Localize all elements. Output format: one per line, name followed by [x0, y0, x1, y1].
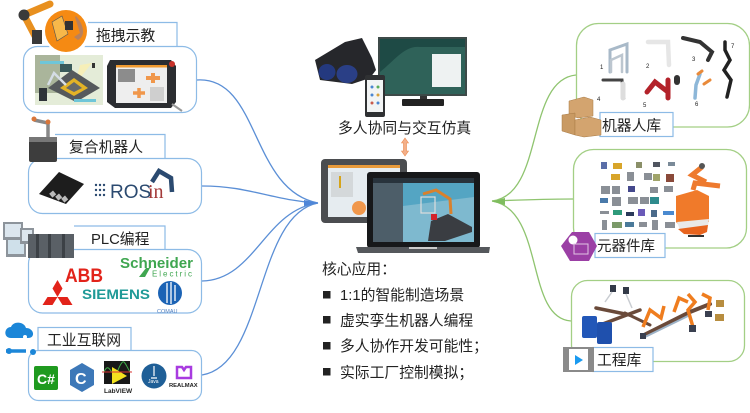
- robot library numbers: 7: [731, 44, 735, 50]
- logo: LabVIEW: [102, 361, 133, 395]
- icon: PLC modules: [28, 234, 74, 258]
- list item 3: 多人协作开发可能性；: [340, 338, 488, 355]
- panel frame: [572, 280, 744, 362]
- panel: 机器人库: [562, 24, 750, 137]
- connectors: blue curves to the core: [197, 80, 318, 375]
- icon: phone: [365, 75, 385, 117]
- icon: mobile robot: [29, 116, 57, 162]
- robot library numbers: [597, 44, 735, 109]
- robot library numbers: 5: [643, 103, 647, 109]
- heading: PLC编程: PLC编程: [91, 231, 150, 248]
- heading: 元器件库: 元器件库: [597, 238, 655, 255]
- icon: VR headset: [315, 38, 376, 84]
- heading: 核心应用: 核心应用：: [322, 260, 396, 278]
- label box: 工程库: [593, 348, 653, 372]
- arrowhead: green: [492, 198, 505, 205]
- panel frame: [28, 158, 202, 214]
- image: production line: [582, 285, 724, 344]
- logo: C++: [70, 363, 94, 392]
- logo: Mitsubishi: [42, 280, 72, 305]
- panel: 复合机器人: [28, 116, 202, 214]
- panel: 工程库: [563, 280, 744, 372]
- heading: 复合机器人: 复合机器人: [69, 138, 143, 156]
- logo: SIEMENS: SIEMENS: [82, 287, 150, 302]
- icon: cloud and tools: [5, 323, 36, 355]
- heading: 拖拽示教: 拖拽示教: [96, 28, 155, 44]
- logo: Java: Java: [148, 379, 159, 385]
- logo: Schneider Electric: Schneider: [120, 256, 193, 272]
- panel frame: [576, 24, 750, 127]
- image: component grid: [600, 162, 675, 230]
- logo: REALMAX: [169, 367, 198, 389]
- image: teach pendant: [107, 60, 182, 111]
- icon: film strip: [563, 347, 594, 372]
- connectors: green curves to the core: [492, 75, 576, 321]
- logo: C++: C: [75, 371, 87, 388]
- icon: cardboard boxes: [562, 97, 601, 137]
- text block: 核心应用: [322, 260, 488, 382]
- logo: Schneider Electric: Electric: [152, 270, 192, 278]
- panel: 拖拽示教: [18, 4, 196, 112]
- label box: PLC编程: [74, 226, 165, 249]
- panel: 元器件库: [561, 150, 746, 261]
- logo: ROSin: in: [148, 181, 164, 203]
- icon: hand guiding: [44, 9, 90, 55]
- icon: robot arm: [18, 4, 50, 44]
- robot library numbers: 2: [646, 64, 650, 70]
- panel: PLC编程: [3, 222, 202, 315]
- image: factory cell: [35, 55, 103, 105]
- logo: ROSin: ROS: [110, 182, 151, 203]
- icon: laptop: [356, 172, 490, 253]
- heading: 工业互联网: 工业互联网: [47, 332, 121, 349]
- logo: Schneider Electric: [120, 256, 193, 278]
- icon: tablet: [321, 159, 407, 223]
- label box: 机器人库: [600, 112, 673, 136]
- robot library numbers: 1: [600, 65, 604, 71]
- logo: COMAU: COMAU: [157, 309, 178, 315]
- arrow: double orange: [402, 138, 408, 156]
- label box: 复合机器人: [55, 134, 165, 158]
- heading: 多人协同与交互仿真: 多人协同与交互仿真: [338, 119, 471, 137]
- robot library numbers: 6: [695, 102, 699, 108]
- logo: C#: [34, 366, 58, 390]
- panel frame: [28, 350, 202, 400]
- icon: desktop monitor: [378, 37, 467, 106]
- panel frame: [574, 150, 746, 248]
- label box: 元器件库: [595, 234, 665, 258]
- label box: 工业互联网: [38, 328, 131, 352]
- logo: LabVIEW: LabVIEW: [104, 388, 133, 395]
- list item 4: 实际工厂控制模拟；: [340, 364, 473, 382]
- image: orange mobile robot: [676, 163, 720, 236]
- icon: HMI screens: [3, 222, 34, 257]
- logo: C#: C#: [37, 371, 55, 387]
- icon: circuit board: [39, 172, 84, 204]
- list item 1: 1:1的智能制造场景: [340, 286, 464, 304]
- logo: ROSin: [95, 171, 172, 203]
- logo: Java: [142, 364, 166, 388]
- icon: purple hexagon: [561, 232, 597, 261]
- image: robot collection: [603, 38, 731, 98]
- heading: 工程库: 工程库: [597, 352, 642, 369]
- logo: COMAU: [157, 281, 182, 315]
- panel frame: [24, 46, 196, 112]
- panel: 多人协同与交互仿真 devices: [315, 37, 471, 137]
- robot library numbers: 3: [692, 57, 696, 63]
- label box: 拖拽示教: [88, 22, 177, 46]
- logo: ABB: ABB: [65, 266, 103, 287]
- list item 2: 虚实孪生机器人编程: [340, 312, 473, 330]
- panel: tablet and laptop core: [321, 159, 490, 253]
- panel: 工业互联网: [5, 323, 202, 400]
- heading: 机器人库: 机器人库: [602, 118, 661, 134]
- logo: REALMAX: REALMAX: [169, 383, 198, 389]
- arrowhead: blue: [304, 200, 318, 206]
- robot library numbers: 4: [597, 97, 601, 103]
- panel frame: [28, 250, 202, 313]
